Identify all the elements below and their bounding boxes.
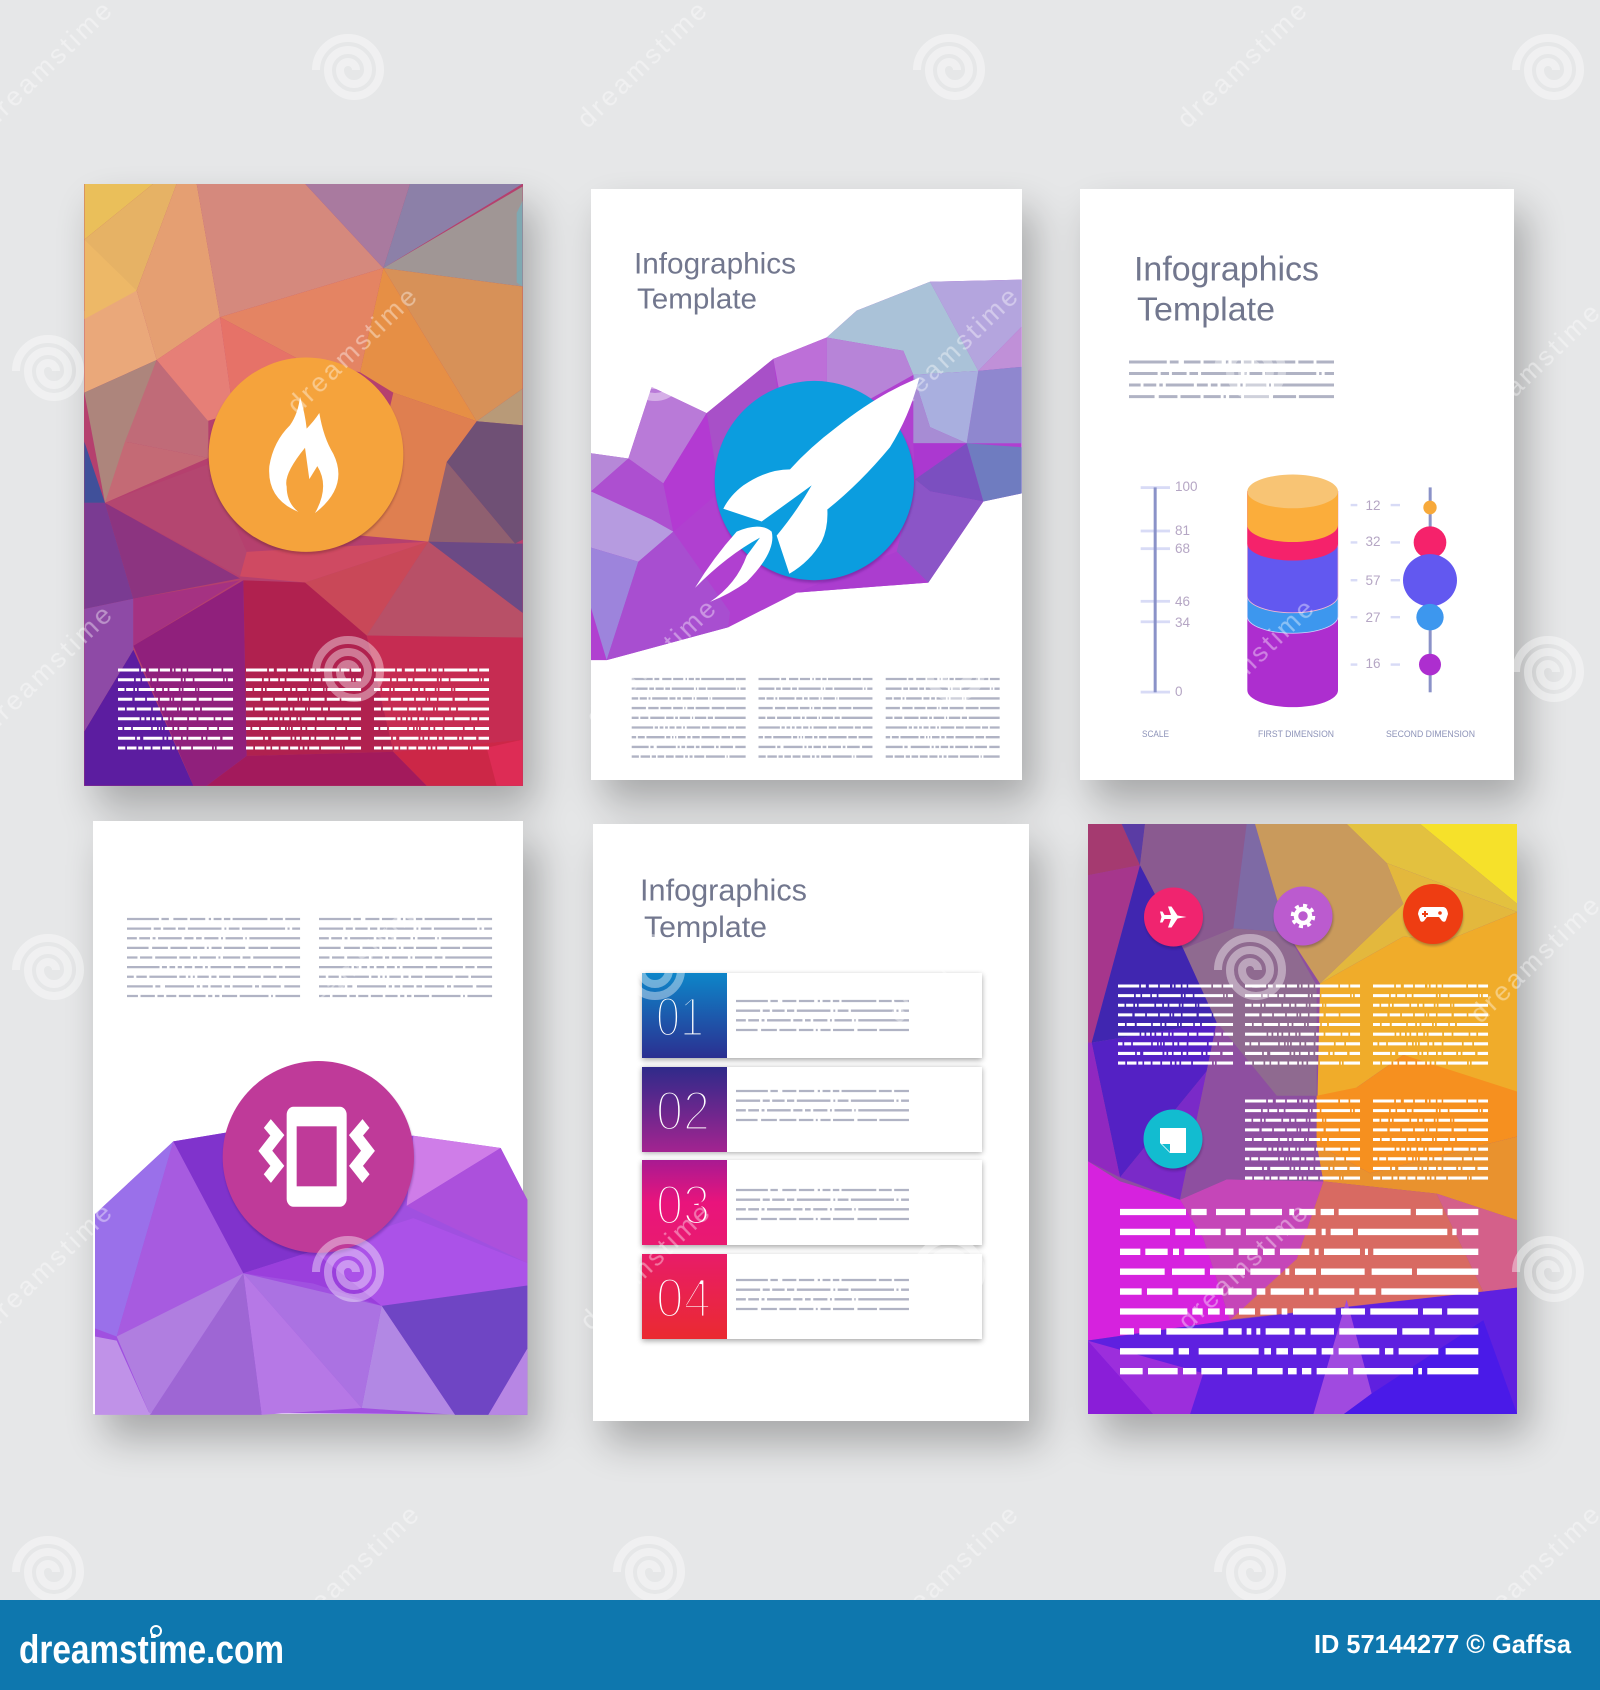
watermark text: dreamstime xyxy=(882,1497,1026,1638)
text columns xyxy=(127,919,492,996)
text columns xyxy=(632,679,1000,757)
low-poly band with rocket badge xyxy=(591,280,1022,660)
panel: flame poster xyxy=(84,184,523,786)
panel: chart sheet xyxy=(1080,189,1514,780)
icon shadow xyxy=(714,432,916,584)
low-poly hill with phone badge xyxy=(95,1061,527,1415)
panel: icons poster xyxy=(1088,824,1517,1414)
axis captions xyxy=(1142,729,1475,740)
scale numbers: 68 xyxy=(1175,541,1190,556)
footer band xyxy=(0,1600,1600,1690)
scale numbers: 81 xyxy=(1175,523,1190,538)
low-poly background: warm xyxy=(84,184,523,786)
list row 04: 04 xyxy=(656,1266,711,1329)
title xyxy=(634,248,796,316)
intro text xyxy=(1129,362,1334,397)
scale numbers: 46 xyxy=(1175,594,1190,609)
scale axis xyxy=(1141,486,1170,694)
bubble numbers xyxy=(1365,498,1381,671)
axis captions: FIRST DIMENSION xyxy=(1258,729,1334,740)
footer image id: ID 57144277 © Gaffsa xyxy=(1314,1629,1572,1659)
list row 02: 02 xyxy=(656,1079,710,1142)
watermark text: dreamstime xyxy=(283,893,427,1034)
bubble numbers: 32 xyxy=(1365,534,1381,549)
scale numbers: 34 xyxy=(1175,615,1191,630)
title: Template xyxy=(637,284,757,316)
panel: vibrating phone poster xyxy=(93,821,527,1415)
icon: sticky note xyxy=(1144,1110,1202,1168)
icon: vibrating phone xyxy=(265,1107,368,1207)
watermark text: dreamstime xyxy=(281,279,425,420)
title: Infographics xyxy=(634,248,796,280)
icon: plane xyxy=(1144,888,1203,946)
footer logo: dreamstime.com xyxy=(19,1628,284,1672)
panel: numbered list sheet xyxy=(593,824,1029,1421)
icon: gamepad xyxy=(1403,884,1463,944)
bubble numbers: 16 xyxy=(1365,656,1381,671)
icon: flame xyxy=(269,397,338,513)
bubble axis xyxy=(1351,487,1457,692)
icon circle: flame xyxy=(209,358,403,552)
list row 03 xyxy=(642,1160,982,1247)
bubble numbers: 12 xyxy=(1365,498,1381,513)
text columns xyxy=(1118,986,1488,1178)
list row 02 xyxy=(642,1067,982,1153)
icon circle: rocket xyxy=(715,381,914,580)
watermark text: dreamstime xyxy=(1172,1195,1316,1336)
watermark text: dreamstime xyxy=(574,1195,718,1336)
title: Template xyxy=(1137,290,1275,328)
title: Template xyxy=(644,911,767,944)
footer logo spiral xyxy=(151,1626,161,1636)
axis captions: SECOND DIMENSION xyxy=(1386,729,1475,740)
title: Infographics xyxy=(1134,250,1319,288)
icon shadow xyxy=(222,1092,416,1256)
list row 01 xyxy=(642,973,982,1060)
bubble numbers: 27 xyxy=(1365,610,1381,625)
text columns xyxy=(118,670,489,748)
list row 04 xyxy=(642,1254,982,1341)
watermark text: dreamstime xyxy=(283,1497,427,1638)
panel shadows xyxy=(96,206,1529,1443)
bubble numbers: 57 xyxy=(1365,573,1381,588)
large text block xyxy=(1120,1212,1478,1371)
title xyxy=(640,874,807,944)
title xyxy=(1134,250,1319,328)
low-poly background: vivid xyxy=(1088,824,1517,1414)
scale numbers xyxy=(1175,479,1198,699)
panel: rocket poster xyxy=(591,189,1022,780)
icon shadows xyxy=(1144,887,1463,1171)
axis captions: SCALE xyxy=(1142,729,1169,740)
scale numbers: 0 xyxy=(1175,684,1183,699)
watermark text: dreamstime xyxy=(882,279,1026,420)
title: Infographics xyxy=(640,874,807,908)
icon shadow xyxy=(208,431,404,556)
stacked cylinder chart xyxy=(1247,475,1338,707)
scale numbers: 100 xyxy=(1175,479,1198,494)
icon: gear xyxy=(1274,886,1332,946)
icon: rocket xyxy=(695,378,919,602)
list row 01: 01 xyxy=(656,985,704,1048)
watermark text: dreamstime xyxy=(580,591,724,732)
watermark text: dreamstime xyxy=(882,888,1026,1029)
list row 03: 03 xyxy=(656,1173,710,1236)
icon circle: phone xyxy=(223,1061,414,1253)
watermark text: dreamstime xyxy=(1178,591,1322,732)
